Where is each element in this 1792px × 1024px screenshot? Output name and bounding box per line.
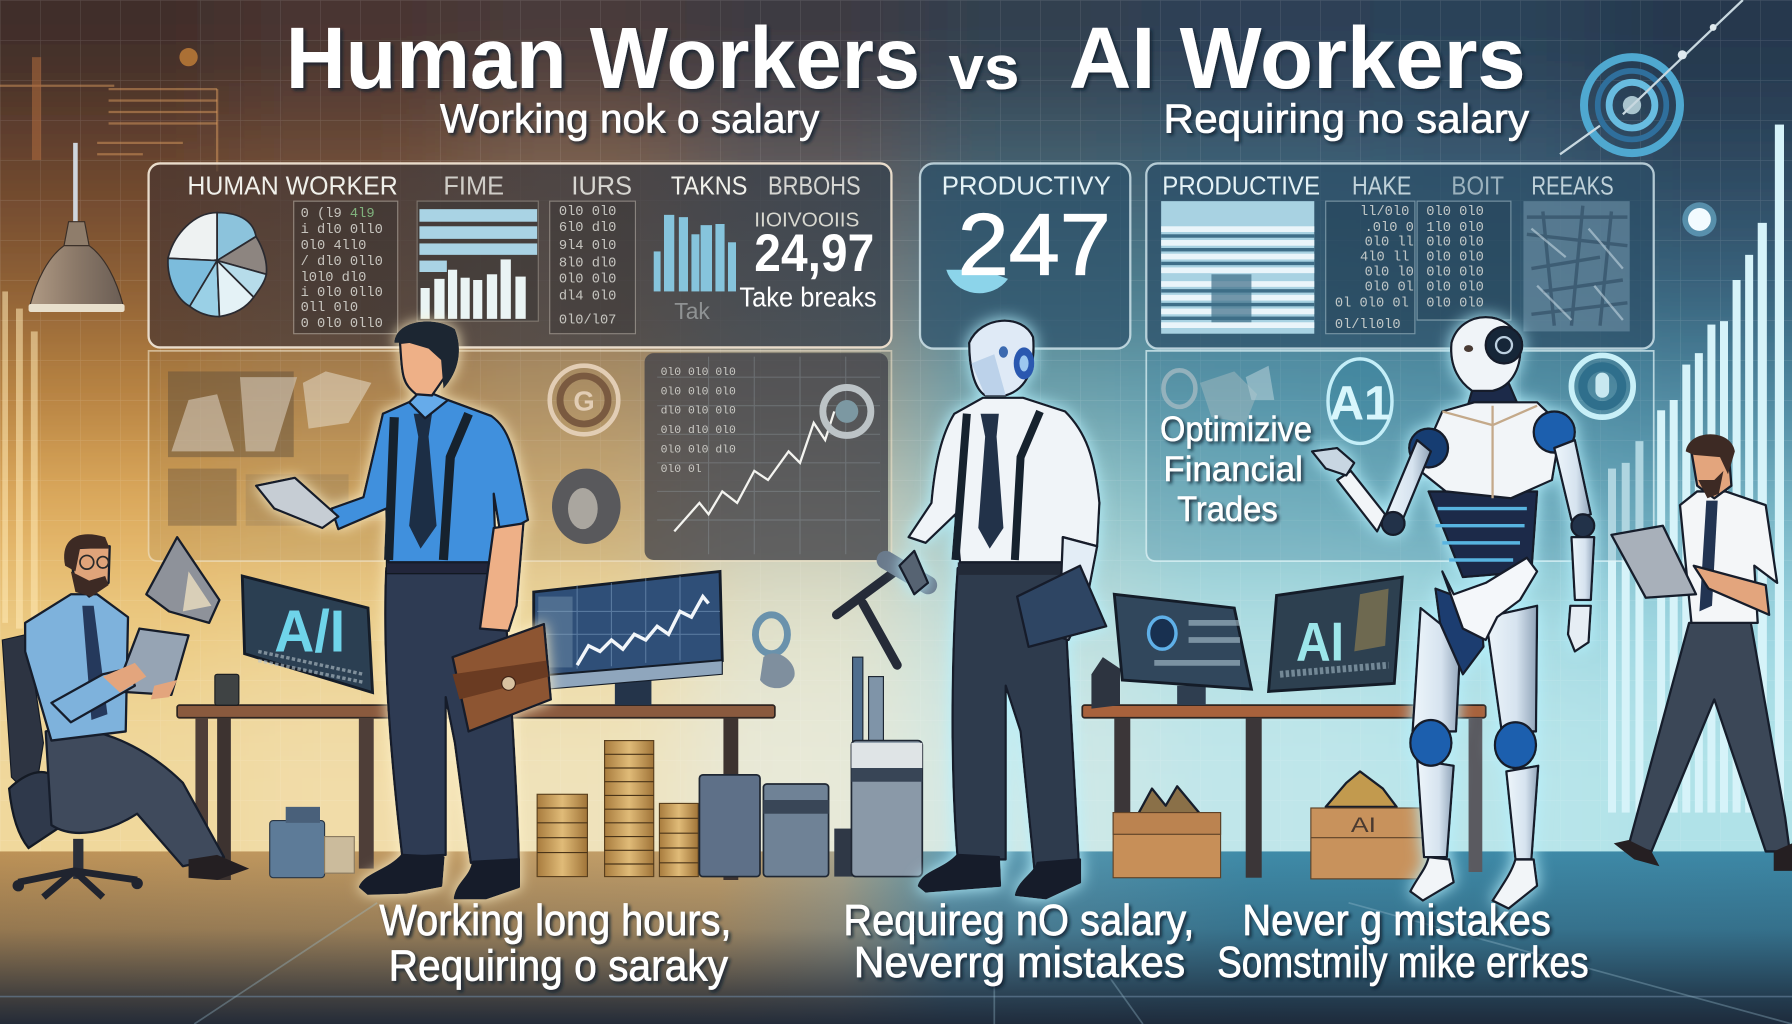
data table 1: 0 (l9 4l9 bbox=[301, 206, 375, 222]
panel: stock chart: dl0 0l0 0l0 bbox=[661, 405, 736, 418]
character: seated human worker bbox=[2, 534, 249, 897]
printer bbox=[270, 807, 354, 878]
tie bbox=[978, 414, 1003, 549]
icon: dark tool arm bbox=[837, 560, 928, 665]
data table 4: 0l0 0l0 bbox=[1426, 204, 1484, 220]
background window frame top left bbox=[0, 48, 217, 171]
character: android in shirt bbox=[899, 321, 1106, 898]
box left with crumpled paper bbox=[1113, 786, 1221, 878]
shirt bbox=[331, 400, 528, 562]
trousers bbox=[1629, 623, 1790, 851]
data table 3: .0l0 0 bbox=[1365, 220, 1414, 236]
title: human workers: Human Workers bbox=[286, 10, 920, 107]
monitor: A/I left bbox=[242, 576, 373, 693]
panel: stock chart: 0l0 0l0 dl0 bbox=[661, 444, 736, 457]
data table 2: 0l0 0l0 bbox=[559, 271, 616, 287]
shirt bbox=[909, 398, 1099, 562]
stat number: 24,97 bbox=[754, 224, 874, 283]
panel: human worker dashboard bbox=[149, 163, 891, 347]
monitor: dashboard bbox=[1114, 594, 1251, 689]
title: vs: vs bbox=[949, 34, 1019, 103]
data table 2: 0l0/l07 bbox=[559, 312, 616, 328]
floor bbox=[0, 851, 1792, 1024]
icon: target with arrow bbox=[1560, 0, 1743, 154]
data table 2: 9l4 0l0 bbox=[559, 238, 616, 254]
icon: floating shade bbox=[146, 537, 219, 623]
forearm bbox=[1694, 566, 1769, 615]
data table 1: 0 0l0 0ll0 bbox=[301, 316, 383, 332]
data table 3: 0l/ll0l0 bbox=[1335, 317, 1401, 333]
subtitle left: Working nok o salary bbox=[440, 96, 820, 142]
left wall light bars bbox=[2, 291, 38, 629]
icon: A1 badge: A1 bbox=[1329, 377, 1391, 430]
text: optimizive financial trades bbox=[1160, 409, 1312, 529]
caption: human left: Working long hours, bbox=[379, 897, 731, 945]
belt bbox=[386, 560, 498, 574]
shoes bbox=[919, 855, 1000, 891]
right forearm bbox=[1051, 537, 1097, 640]
briefcase bbox=[453, 624, 551, 731]
collar bbox=[409, 394, 448, 418]
suspenders bbox=[389, 414, 469, 560]
right arm bbox=[1554, 440, 1591, 520]
head bbox=[969, 321, 1034, 395]
heading: reeaks: REEAKS bbox=[1531, 170, 1614, 200]
panel: productivity 24/7 bbox=[920, 163, 1130, 349]
data table 3: 0l0 0l bbox=[1365, 279, 1414, 295]
data table 1: l0l0 dl0 bbox=[301, 270, 366, 286]
panel: human worker lower bbox=[149, 351, 891, 561]
stat text: hours: IIOIVOOIIS bbox=[754, 208, 859, 231]
panel: stock chart: 0l0 0l bbox=[661, 463, 702, 476]
heading: takns: TAKNS bbox=[671, 170, 747, 200]
data table 4 bbox=[1417, 201, 1511, 320]
bar chart: right wall rising bars bbox=[1608, 125, 1784, 813]
icon: pendant lamp bbox=[29, 143, 125, 312]
forearm bbox=[51, 669, 135, 722]
heading: brbohs: BRBOHS bbox=[768, 170, 861, 200]
panel: stock chart: 0l0 0l0 0l0 bbox=[661, 385, 736, 398]
data table 4: 0l0 0l0 bbox=[1426, 264, 1484, 280]
monitor: AI: AI bbox=[1296, 611, 1344, 673]
data table 1: 0l0 4ll0 bbox=[301, 238, 366, 254]
data table 4: 0l0 0l0 bbox=[1426, 295, 1484, 311]
tall cylinder and tubes bbox=[851, 657, 922, 877]
folder bbox=[1017, 566, 1106, 647]
collage icons bbox=[168, 371, 371, 526]
icon: copper ring bbox=[550, 366, 618, 434]
accent arc bbox=[946, 270, 1008, 293]
panel: stock chart: 0l0 0l0 0l0 bbox=[661, 366, 736, 379]
title: ai workers: AI Workers bbox=[1069, 10, 1526, 107]
phone on desk bbox=[215, 674, 239, 705]
data table 3: 0l 0l0 0l bbox=[1335, 295, 1409, 311]
torso shell bbox=[1417, 402, 1561, 498]
striped chart bbox=[1161, 201, 1314, 334]
bar block chart bbox=[417, 201, 538, 321]
shirt bbox=[25, 594, 128, 741]
shirt bbox=[1680, 491, 1777, 623]
held paper bbox=[256, 478, 338, 528]
caption: ai centre bbox=[843, 897, 1194, 987]
monitor: AI bbox=[1269, 577, 1402, 691]
left hand object bbox=[899, 551, 928, 594]
tie bbox=[409, 414, 437, 549]
data table 1: i dl0 0ll0 bbox=[301, 222, 383, 238]
head bbox=[394, 321, 459, 395]
data table 3 bbox=[1326, 201, 1415, 334]
character: standing human worker bbox=[256, 321, 551, 898]
shoes bbox=[360, 855, 443, 894]
tablet bbox=[115, 629, 189, 695]
data table 4: 0l0 0l0 bbox=[1426, 235, 1484, 251]
icon: small hook ornament bbox=[755, 615, 795, 688]
subtitle right: Requiring no salary bbox=[1163, 96, 1530, 142]
tie bbox=[82, 606, 107, 720]
server towers bbox=[699, 775, 855, 877]
label: AI bbox=[1351, 812, 1376, 837]
character: walking worker with clipboard bbox=[1611, 434, 1792, 871]
data table 1: / dl0 0ll0 bbox=[301, 254, 383, 270]
shoes bbox=[1614, 840, 1659, 866]
icon: glowing dot bbox=[1682, 202, 1717, 237]
caption: ai centre: Neverrg mistakes bbox=[854, 939, 1185, 987]
belt bbox=[958, 562, 1063, 575]
right desk bbox=[1082, 705, 1486, 878]
text: optimizive financial trades: Optimizive bbox=[1160, 409, 1312, 449]
data table 4: 1l0 0l0 bbox=[1426, 220, 1484, 236]
caption: human left: Requiring o saraky bbox=[389, 943, 728, 991]
caption: ai centre: Requireg nO salary, bbox=[843, 897, 1194, 945]
caption: ai right: Somstmily mike errkes bbox=[1217, 939, 1589, 987]
right forearm and hand bbox=[480, 523, 523, 631]
data table 1: i 0l0 0ll0 bbox=[301, 285, 383, 301]
heading: fime: FIME bbox=[443, 170, 504, 200]
text: optimizive financial trades: Trades bbox=[1177, 489, 1278, 529]
legs bbox=[1410, 589, 1538, 909]
heading: productivy: PRODUCTIVY bbox=[942, 170, 1111, 200]
monitor: stock chart bbox=[534, 571, 722, 705]
title bbox=[286, 10, 1526, 107]
head bbox=[1686, 434, 1735, 498]
panel: stock chart bbox=[645, 353, 888, 560]
caption: ai right: Never g mistakes bbox=[1242, 897, 1551, 945]
icon: copper ring: G bbox=[573, 385, 595, 416]
left desk bbox=[177, 705, 775, 880]
panel: stock chart: 0l0 dl0 0l0 bbox=[661, 424, 736, 437]
data table 2: 6l0 dl0 bbox=[559, 220, 616, 236]
stat number: 24/7: 247 bbox=[958, 196, 1111, 293]
data table 3: 0l0 l0 bbox=[1365, 264, 1414, 280]
icon: speaker disc bbox=[552, 469, 621, 544]
data table 4: 0l0 0l0 bbox=[1426, 279, 1484, 295]
trousers bbox=[953, 568, 1079, 869]
character: humanoid robot bbox=[1312, 317, 1594, 909]
shoulders bbox=[1409, 429, 1448, 467]
panel: ai dashboard bbox=[1146, 163, 1654, 349]
data table 2 bbox=[550, 201, 635, 334]
text: optimizive financial trades: Financial bbox=[1163, 449, 1303, 489]
office chair bbox=[2, 634, 143, 897]
clipboard bbox=[1611, 526, 1696, 598]
data table 3: 0l0 ll bbox=[1365, 235, 1414, 251]
data table 3: ll/0l0 bbox=[1360, 204, 1409, 220]
data table 2: dl4 0l0 bbox=[559, 288, 616, 304]
data table 2: 0l0 0l0 bbox=[559, 204, 616, 220]
bar chart: blue bars: Tak bbox=[674, 298, 710, 324]
stat caption: Take breaks bbox=[739, 281, 877, 312]
caption: ai right bbox=[1217, 897, 1589, 987]
bar chart: blue bars bbox=[654, 215, 736, 324]
icon: A1 badge bbox=[1328, 359, 1392, 443]
pattern block bbox=[1523, 201, 1630, 331]
shoe bbox=[189, 855, 249, 880]
caption: human left bbox=[379, 897, 731, 991]
icon: ring bbox=[1571, 355, 1633, 417]
inner hip bbox=[1435, 589, 1483, 674]
data table 4: 0l0 0l0 bbox=[1426, 250, 1484, 266]
feet bbox=[1410, 857, 1454, 901]
head bbox=[64, 534, 110, 597]
box right labelled AI bbox=[1311, 771, 1431, 879]
pelvis bbox=[1442, 558, 1537, 640]
trousers bbox=[46, 728, 224, 866]
suspenders bbox=[955, 411, 1040, 560]
heading: human worker: HUMAN WORKER bbox=[187, 170, 398, 200]
knees bbox=[1410, 720, 1451, 766]
heading: boit: BOIT bbox=[1451, 170, 1504, 200]
coin stacks bbox=[537, 741, 698, 877]
left arm bbox=[1385, 440, 1431, 523]
heading: hake: HAKE bbox=[1352, 170, 1411, 200]
panel: ai lower bbox=[1146, 351, 1654, 561]
heading: productive: PRODUCTIVE bbox=[1162, 170, 1320, 200]
data table 1 bbox=[294, 201, 398, 334]
collage icons bbox=[1163, 366, 1274, 423]
head bbox=[1451, 317, 1522, 391]
data table 1: 0ll 0l0 bbox=[301, 300, 358, 316]
data table 3: 4l0 ll bbox=[1360, 250, 1409, 266]
ribs and neck bbox=[1429, 383, 1537, 577]
tie bbox=[1699, 501, 1718, 611]
monitor: right stand and object bbox=[1091, 657, 1206, 709]
heading: iurs: IURS bbox=[571, 170, 632, 200]
trousers bbox=[385, 568, 519, 863]
monitor: A/I left: A/I bbox=[274, 597, 345, 664]
pie chart bbox=[168, 213, 267, 317]
data table 2: 8l0 dl0 bbox=[559, 255, 616, 271]
